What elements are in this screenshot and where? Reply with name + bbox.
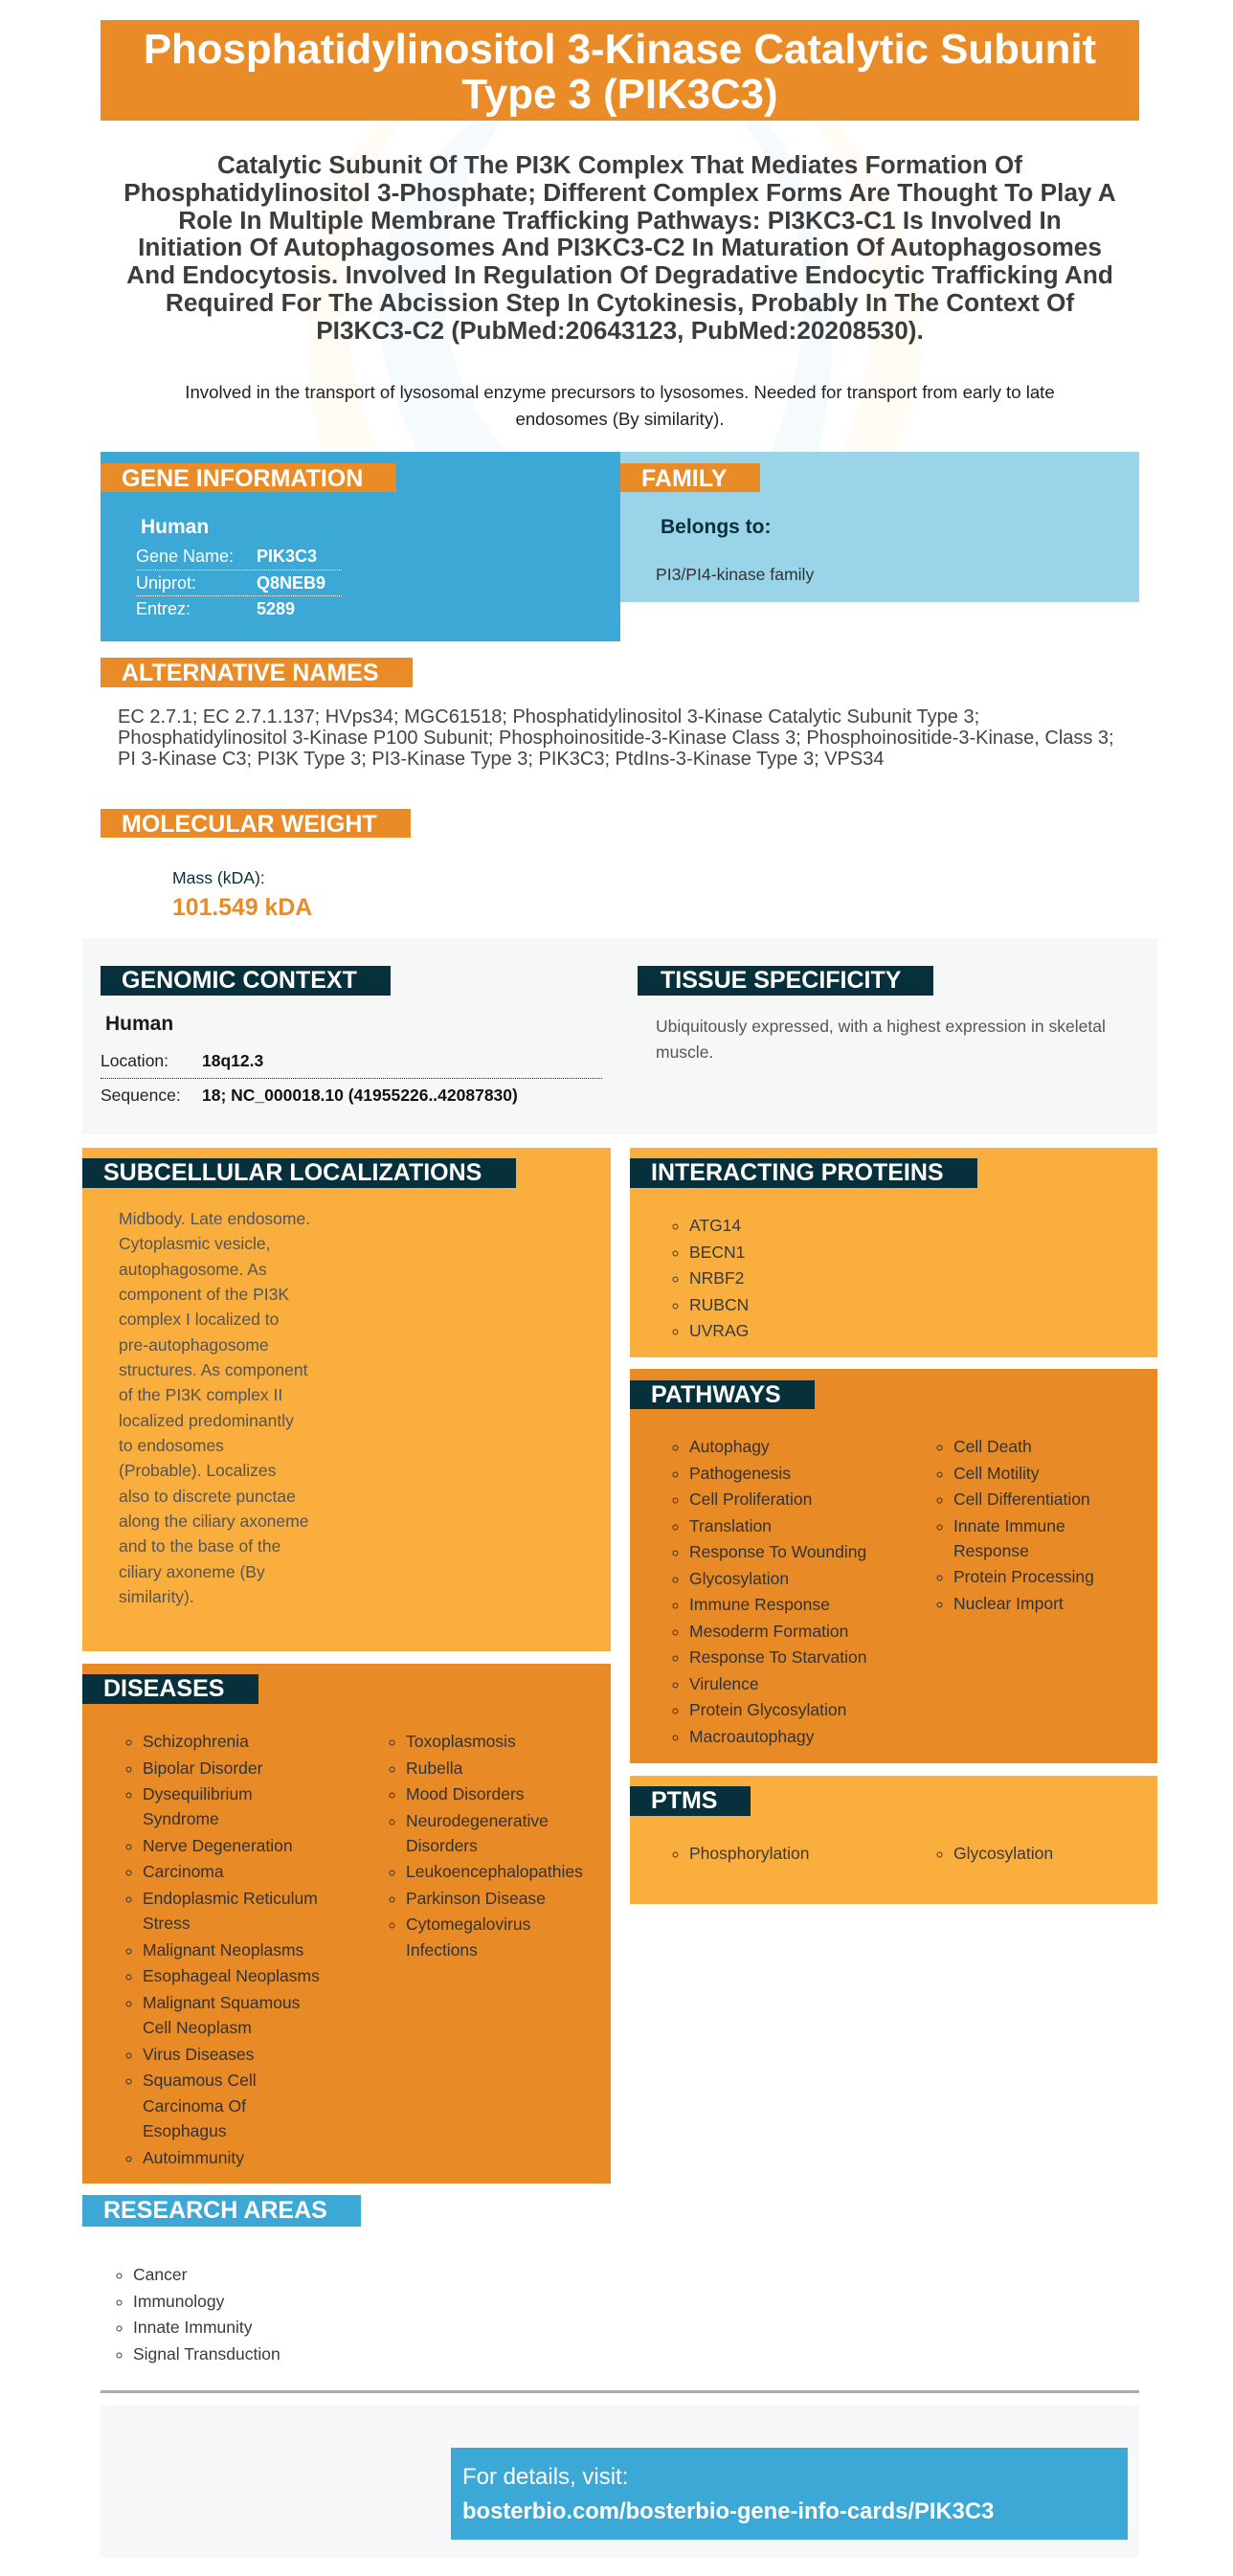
heading: tissue specificity: TISSUE SPECIFICITY xyxy=(661,967,901,994)
tissue specificity text: Ubiquitously expressed, with a highest expression in skeletal xyxy=(656,1017,1106,1036)
localization text: Cytoplasmic vesicle, xyxy=(119,1234,271,1253)
disease list column 2: Cytomegalovirus xyxy=(406,1915,530,1934)
pathway list column 1: Response To Starvation xyxy=(689,1647,867,1667)
heading: alternative names: ALTERNATIVE NAMES xyxy=(122,660,379,686)
pathway list column 1: Virulence xyxy=(689,1673,759,1692)
pathway list column 1 xyxy=(672,1437,867,1746)
panel: pathways xyxy=(630,1369,1157,1763)
heading: molecular weight: MOLECULAR WEIGHT xyxy=(122,811,377,838)
pathway list column 2 xyxy=(936,1437,1094,1613)
localization text: also to discrete punctae xyxy=(119,1487,296,1506)
panel: PTMs xyxy=(630,1776,1157,1904)
protein function summary: And Endocytosis. Involved In Regulation Of Degradative Endocytic Trafficking And xyxy=(126,260,1113,289)
PTM list column 2: Glycosylation xyxy=(953,1844,1053,1863)
heading: PTMs: PTMS xyxy=(651,1787,717,1814)
description paragraph: endosomes (By similarity). xyxy=(515,409,724,429)
panel: footer xyxy=(101,2406,1139,2558)
pathway list column 2: Cell Motility xyxy=(953,1463,1039,1482)
gene info table: Q8NEB9 xyxy=(257,573,325,593)
mass value: 101.549 kDA xyxy=(172,895,312,921)
research areas list xyxy=(117,2265,280,2363)
pathway list column 2: Innate Immune xyxy=(953,1516,1065,1535)
pathway list column 2: Cell Death xyxy=(953,1437,1032,1456)
research areas list: Cancer xyxy=(133,2265,187,2284)
pathway list column 2: Cell Differentiation xyxy=(953,1490,1090,1509)
localization text: ciliary axoneme (By xyxy=(119,1562,265,1581)
sequence row: Sequence: xyxy=(101,1086,181,1105)
pathway list column 1: Protein Glycosylation xyxy=(689,1700,846,1719)
panel: genomic context and tissue specificity: 18q12.3 xyxy=(202,1051,263,1070)
pathway list column 1: Immune Response xyxy=(689,1595,830,1614)
pathway list column 2: Response xyxy=(953,1541,1029,1560)
panel: gene information xyxy=(101,452,620,641)
alternative names text: Phosphatidylinositol 3-Kinase P100 Subunit; Phosphoinositide-3-Kinase Class 3; Phosphoinositide-3-Kinase, Class 3; xyxy=(118,728,1114,749)
background watermark logo xyxy=(306,121,922,452)
protein function summary: Initiation Of Autophagosomes And PI3KC3-C2 In Maturation Of Autophagosomes xyxy=(138,233,1102,261)
disease list column 2: Parkinson Disease xyxy=(406,1889,546,1908)
gene info table: 5289 xyxy=(257,599,295,618)
research areas list: Innate Immunity xyxy=(133,2318,253,2337)
disease list column 1: Esophageal Neoplasms xyxy=(143,1966,320,1985)
disease list column 1: Malignant Neoplasms xyxy=(143,1940,303,1960)
alternative names text: EC 2.7.1; EC 2.7.1.137; HVps34; MGC61518; Phosphatidylinositol 3-Kinase Catalytic Subunit Type 3; xyxy=(118,706,979,728)
disease list column 2: Mood Disorders xyxy=(406,1784,525,1803)
pathway list column 1: Pathogenesis xyxy=(689,1463,791,1482)
alternative names text: PI 3-Kinase C3; PI3K Type 3; PI3-Kinase Type 3; PIK3C3; PtdIns-3-Kinase Type 3; VPS34 xyxy=(118,749,884,770)
protein list: RUBCN xyxy=(689,1294,749,1313)
heading: pathways xyxy=(630,1380,815,1409)
protein function summary xyxy=(123,150,1116,345)
panel: family xyxy=(620,452,1139,602)
localization text: similarity). xyxy=(119,1587,194,1606)
disease list column 1: Carcinoma xyxy=(143,1862,224,1881)
heading: interacting proteins: INTERACTING PROTEINS xyxy=(651,1159,944,1186)
family name: PI3/PI4-kinase family xyxy=(656,565,814,584)
protein list: ATG14 xyxy=(689,1216,741,1235)
localization text: of the PI3K complex II xyxy=(119,1385,282,1404)
protein function summary: PI3KC3-C2 (PubMed:20643123, PubMed:20208530). xyxy=(316,316,924,345)
description paragraph xyxy=(185,382,1055,429)
localization text: autophagosome. As xyxy=(119,1260,267,1279)
localization text: structures. As component xyxy=(119,1360,307,1379)
heading: family: FAMILY xyxy=(641,465,727,492)
localization text: and to the base of the xyxy=(119,1536,280,1556)
callout label: For details, visit: xyxy=(462,2464,628,2490)
disease list column 1: Malignant Squamous xyxy=(143,1993,300,2012)
gene info table: Gene Name: xyxy=(136,547,234,566)
heading: diseases xyxy=(82,1674,258,1704)
heading: subcellular localizations: SUBCELLULAR LOCALIZATIONS xyxy=(103,1159,482,1186)
mass label: Mass (kDA): xyxy=(172,868,265,887)
research areas list: Signal Transduction xyxy=(133,2343,280,2363)
callout URL: bosterbio.com/bosterbio-gene-info-cards/PIK3C3 xyxy=(462,2498,994,2524)
pathway list column 1: Translation xyxy=(689,1516,772,1535)
disease list column 1: Syndrome xyxy=(143,1809,219,1828)
protein function summary: Catalytic Subunit Of The PI3K Complex That Mediates Formation Of xyxy=(217,150,1022,179)
protein list: NRBF2 xyxy=(689,1268,744,1288)
organism label: Human xyxy=(105,1013,173,1035)
protein function summary: Role In Multiple Membrane Trafficking Pathways: PI3KC3-C1 Is Involved In xyxy=(178,206,1062,235)
pathway list column 1: Autophagy xyxy=(689,1437,770,1456)
disease list column 1: Virus Diseases xyxy=(143,2045,254,2064)
disease list column 2: Toxoplasmosis xyxy=(406,1732,516,1751)
pathway list column 1: Glycosylation xyxy=(689,1568,789,1587)
title banner: Phosphatidylinositol 3-Kinase Catalytic Subunit xyxy=(144,26,1096,73)
heading: research areas: RESEARCH AREAS xyxy=(103,2197,327,2224)
disease list column 2 xyxy=(389,1732,583,1960)
localization text: Midbody. Late endosome. xyxy=(119,1209,310,1228)
disease list column 2: Disorders xyxy=(406,1836,478,1855)
research areas list: Immunology xyxy=(133,2292,224,2311)
localization text: pre-autophagosome xyxy=(119,1335,269,1355)
panel: interacting proteins xyxy=(630,1148,1157,1357)
belongs to label: Belongs to: xyxy=(661,516,772,538)
panel: genomic context and tissue specificity xyxy=(82,938,1157,1134)
disease list column 1: Stress xyxy=(143,1914,191,1933)
panel: diseases xyxy=(82,1664,611,2184)
protein list: BECN1 xyxy=(689,1243,745,1262)
localization text xyxy=(119,1209,310,1606)
protein list xyxy=(672,1216,749,1340)
disease list column 1: Endoplasmic Reticulum xyxy=(143,1889,318,1908)
heading: genomic context: GENOMIC CONTEXT xyxy=(122,967,357,994)
tissue specificity text xyxy=(656,1017,1106,1062)
disease list column 1: Dysequilibrium xyxy=(143,1784,253,1803)
protein function summary: Phosphatidylinositol 3-Phosphate; Different Complex Forms Are Thought To Play A xyxy=(123,178,1116,207)
description paragraph: Involved in the transport of lysosomal enzyme precursors to lysosomes. Needed for transport from early to late xyxy=(185,382,1055,402)
disease list column 1: Nerve Degeneration xyxy=(143,1836,293,1855)
gene info table: PIK3C3 xyxy=(257,547,317,566)
heading: diseases: DISEASES xyxy=(103,1675,224,1702)
pathway list column 1: Response To Wounding xyxy=(689,1542,866,1561)
panel: genomic context and tissue specificity: 18; NC_000018.10 (41955226..42087830) xyxy=(202,1086,518,1105)
title banner: Type 3 (PIK3C3) xyxy=(461,71,778,118)
localization text: to endosomes xyxy=(119,1436,224,1455)
localization text: (Probable). Localizes xyxy=(119,1461,276,1480)
pathway list column 2: Protein Processing xyxy=(953,1567,1094,1586)
pathway list column 2: Nuclear Import xyxy=(953,1594,1064,1613)
organism label: Human xyxy=(141,516,209,538)
disease list column 1 xyxy=(126,1732,320,2167)
localization text: component of the PI3K xyxy=(119,1285,289,1304)
pathway list column 1: Mesoderm Formation xyxy=(689,1622,848,1641)
gene info table xyxy=(136,547,342,618)
gene info table: Entrez: xyxy=(136,599,191,618)
alternative names text xyxy=(118,706,1114,770)
disease list column 1: Carcinoma Of xyxy=(143,2096,246,2116)
PTM list column 1: Phosphorylation xyxy=(689,1844,810,1863)
gene info table: Uniprot: xyxy=(136,573,196,593)
heading: gene information: GENE INFORMATION xyxy=(122,465,363,492)
panel: subcellular localizations xyxy=(82,1148,611,1651)
disease list column 1: Squamous Cell xyxy=(143,2071,257,2090)
localization text: localized predominantly xyxy=(119,1411,294,1430)
heading: pathways: PATHWAYS xyxy=(651,1381,781,1408)
disease list column 1: Cell Neoplasm xyxy=(143,2018,252,2037)
heading: research areas xyxy=(82,2195,361,2227)
disease list column 2: Leukoencephalopathies xyxy=(406,1862,583,1881)
pathway list column 1: Cell Proliferation xyxy=(689,1490,812,1509)
heading: PTMs xyxy=(630,1786,751,1816)
location row: Location: xyxy=(101,1051,168,1070)
disease list column 2: Infections xyxy=(406,1940,478,1960)
tissue specificity text: muscle. xyxy=(656,1042,713,1062)
title banner xyxy=(101,20,1139,121)
disease list column 1: Esophagus xyxy=(143,2121,227,2140)
heading: family xyxy=(620,463,760,492)
disease list column 1: Bipolar Disorder xyxy=(143,1758,262,1777)
disease list column 2: Rubella xyxy=(406,1758,462,1777)
protein function summary: Required For The Abcission Step In Cytokinesis, Probably In The Context Of xyxy=(166,288,1074,317)
pathway list column 1: Macroautophagy xyxy=(689,1727,814,1746)
localization text: complex I localized to xyxy=(119,1310,279,1329)
protein list: UVRAG xyxy=(689,1321,749,1340)
disease list column 1: Schizophrenia xyxy=(143,1732,249,1751)
disease list column 2: Neurodegenerative xyxy=(406,1811,549,1830)
disease list column 1: Autoimmunity xyxy=(143,2148,244,2167)
localization text: along the ciliary axoneme xyxy=(119,1512,308,1531)
callout: details link xyxy=(451,2448,1128,2540)
